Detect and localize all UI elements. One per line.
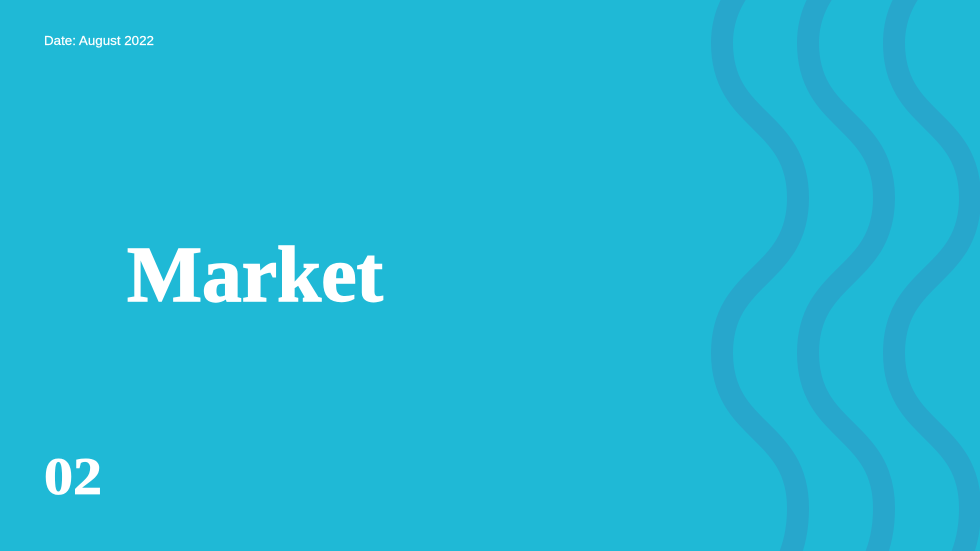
date label: Date: August 2022 [44,33,154,48]
wave 3 [894,0,970,551]
wave pattern [722,0,970,551]
wave 2 [808,0,884,551]
title: Market [127,232,383,319]
section number: 02 [44,448,102,506]
wave 1 [722,0,798,551]
